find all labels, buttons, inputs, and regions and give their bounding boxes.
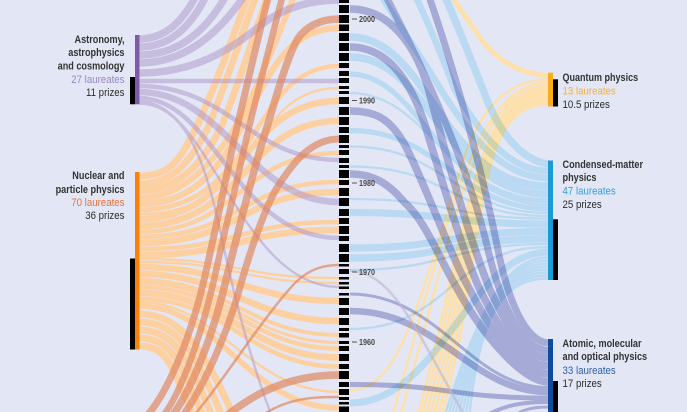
year labels: 1980 xyxy=(359,178,375,188)
label: condensed-matter physics: 47 laureates xyxy=(562,186,616,198)
ribbons: condensed-matter physics xyxy=(350,0,548,412)
label: atomic, molecular and optical physics: 17 prizes xyxy=(562,379,602,390)
ribbons: field below the crop, to the left xyxy=(130,0,339,412)
year labels xyxy=(352,14,375,347)
ribbon: pale thread from 1970 xyxy=(350,271,470,412)
label: atomic, molecular and optical physics xyxy=(562,338,647,390)
label: quantum physics xyxy=(562,72,638,111)
year labels: 1970 xyxy=(359,267,375,277)
ribbons: nuclear and particle physics xyxy=(139,0,339,412)
label: nuclear and particle physics: 70 laureates xyxy=(71,198,124,209)
year labels: 1990 xyxy=(359,96,375,105)
label: quantum physics: 13 laureates xyxy=(562,86,616,98)
label: condensed-matter physics xyxy=(562,159,643,211)
label: atomic, molecular and optical physics: 33 laureates xyxy=(562,366,616,377)
year labels: 2000 xyxy=(359,14,375,24)
label: condensed-matter physics: physics xyxy=(562,172,597,184)
ribbons: atomic, molecular and optical physics xyxy=(350,0,548,412)
label: nuclear and particle physics: particle physics xyxy=(56,184,125,196)
label: nuclear and particle physics xyxy=(56,170,125,222)
ribbons: astronomy, astrophysics and cosmology xyxy=(139,0,339,412)
label: quantum physics: Quantum physics xyxy=(562,72,638,84)
label: astronomy, astrophysics and cosmology xyxy=(58,34,125,99)
label: astronomy, astrophysics and cosmology: astrophysics xyxy=(68,47,125,59)
label: atomic, molecular and optical physics: Atomic, molecular xyxy=(562,338,642,350)
label: astronomy, astrophysics and cosmology: Astronomy, xyxy=(75,34,125,46)
label: astronomy, astrophysics and cosmology: 27 laureates xyxy=(71,75,124,86)
label: condensed-matter physics: 25 prizes xyxy=(562,200,602,211)
node bars: condensed-matter physics xyxy=(548,160,558,280)
label: atomic, molecular and optical physics: and optical physics xyxy=(562,351,647,363)
node bars: nuclear and particle physics xyxy=(130,172,140,350)
label: astronomy, astrophysics and cosmology: 11 prizes xyxy=(86,88,124,99)
label: nuclear and particle physics: 36 prizes xyxy=(85,211,124,222)
node bars: atomic, molecular and optical physics xyxy=(548,339,558,412)
node bars: astronomy xyxy=(130,35,140,104)
node bars: quantum physics xyxy=(548,73,558,106)
year labels: 1960 xyxy=(359,337,375,347)
ribbons: quantum physics xyxy=(350,0,548,412)
label: astronomy, astrophysics and cosmology: and cosmology xyxy=(58,61,125,73)
label: condensed-matter physics: Condensed-matter xyxy=(562,159,643,171)
label: nuclear and particle physics: Nuclear and xyxy=(72,170,124,182)
timeline: prize blocks by year xyxy=(339,0,349,412)
label: quantum physics: 10.5 prizes xyxy=(562,100,610,111)
